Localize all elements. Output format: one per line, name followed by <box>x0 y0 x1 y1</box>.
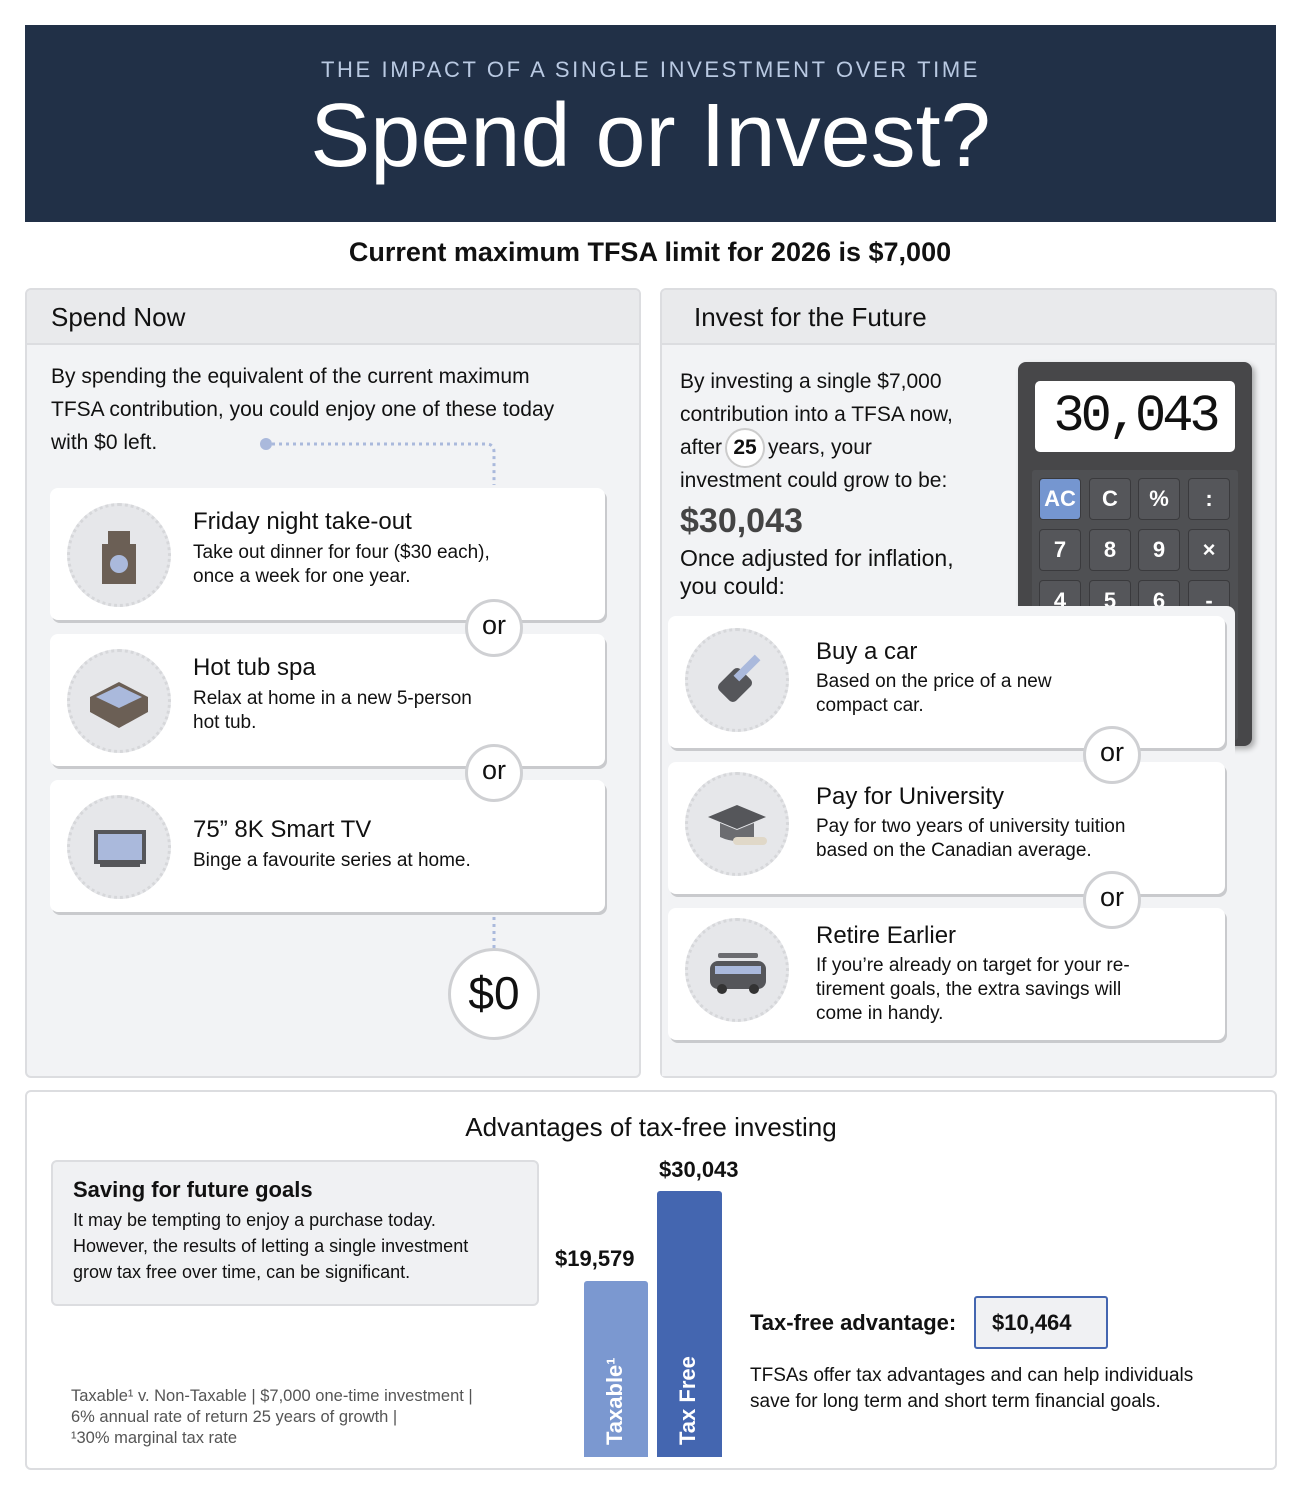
calculator: 30,043 <box>1053 387 1217 446</box>
card: university: Pay for two years of university tuition <box>816 816 1125 837</box>
card: smart tv <box>50 780 605 912</box>
heading: Advantages of tax-free investing <box>465 1112 837 1142</box>
icon: hot tub <box>67 649 171 753</box>
calculator: C <box>1102 486 1118 511</box>
panel: spend now: By spending the equivalent of the current maximum <box>51 365 530 388</box>
bar chart: $19,579 <box>555 1246 635 1271</box>
or badge: or <box>482 755 506 785</box>
TFSA limit heading: Current maximum TFSA limit for 2026 is $7,000 <box>349 237 951 267</box>
tax-free advantage: Tax-free advantage: <box>750 1310 956 1335</box>
$0 badge <box>448 948 540 1040</box>
icon: take-out bag <box>67 503 171 607</box>
card: car: Based on the price of a new <box>816 671 1052 692</box>
icon: van <box>685 918 789 1022</box>
card: university: based on the Canadian average. <box>816 840 1092 861</box>
panel: invest: $30,043 <box>680 502 803 540</box>
saving box: It may be tempting to enjoy a purchase today. <box>73 1210 436 1230</box>
icon: tv <box>67 795 171 899</box>
bar chart <box>555 1157 739 1457</box>
card: take-out <box>50 488 605 620</box>
panel: spend now: Spend Now <box>51 302 185 332</box>
panel: advantages: TFSAs offer tax advantages and can help individuals <box>750 1365 1193 1386</box>
footnote: ¹30% marginal tax rate <box>71 1429 237 1447</box>
calculator: % <box>1149 486 1169 511</box>
panel: invest: investment could grow to be: <box>680 469 947 492</box>
card: smart tv: 75” 8K Smart TV <box>193 816 371 843</box>
card: retire: tirement goals, the extra savings will <box>816 979 1121 1000</box>
card: retire: Retire Earlier <box>816 922 956 949</box>
panel: advantages: $10,464 <box>992 1310 1072 1335</box>
card: hot tub <box>50 634 605 766</box>
panel: invest: after years, your <box>680 436 872 459</box>
panel: invest: Once adjusted for inflation, <box>680 545 954 571</box>
or badge <box>1083 871 1141 929</box>
card: car: compact car. <box>816 695 924 716</box>
calculator: × <box>1203 537 1215 562</box>
card: retire: come in handy. <box>816 1003 943 1024</box>
panel: spend now: TFSA contribution, you could enjoy one of these today <box>51 398 554 421</box>
panel: advantages <box>25 1090 1277 1470</box>
panel: invest: By investing a single $7,000 <box>680 370 942 393</box>
title: Spend or Invest? <box>310 86 991 186</box>
bar chart: $30,043 <box>659 1157 739 1182</box>
or badge: or <box>1100 882 1124 912</box>
icon: car key <box>685 628 789 732</box>
$0 badge: $0 <box>468 967 520 1019</box>
saving box: grow tax free over time, can be significant. <box>73 1262 410 1282</box>
saving box: However, the results of letting a single investment <box>73 1236 468 1256</box>
card: retire <box>668 908 1225 1040</box>
card: take-out: Friday night take-out <box>193 508 412 535</box>
panel: invest: contribution into a TFSA now, <box>680 403 953 426</box>
calculator: 4 <box>1054 588 1066 613</box>
card: smart tv: Binge a favourite series at home. <box>193 850 471 871</box>
or badge: or <box>482 610 506 640</box>
panel: invest: Invest for the Future <box>694 302 927 332</box>
subtitle: THE IMPACT OF A SINGLE INVESTMENT OVER TIME <box>321 57 980 82</box>
card: hot tub: Relax at home in a new 5-person <box>193 688 472 709</box>
saving box <box>51 1160 539 1306</box>
calculator: - <box>1205 588 1213 613</box>
calculator: 9 <box>1153 537 1165 562</box>
or badge <box>1083 726 1141 784</box>
panel: invest: 25 <box>733 436 757 459</box>
card: hot tub: Hot tub spa <box>193 654 316 681</box>
card: take-out: Take out dinner for four ($30 each), <box>193 542 490 563</box>
panel: invest: you could: <box>680 573 785 599</box>
panel: advantages: save for long term and short term financial goals. <box>750 1391 1161 1412</box>
bar chart: Taxable¹ <box>602 1357 627 1445</box>
or badge <box>465 744 523 802</box>
or badge: or <box>1100 737 1124 767</box>
card: car <box>668 616 1225 748</box>
saving box: Saving for future goals <box>73 1177 313 1202</box>
panel: spend now: with $0 left. <box>51 431 157 454</box>
footnote: Taxable¹ v. Non-Taxable | $7,000 one-time investment | <box>71 1387 473 1405</box>
calculator <box>1018 362 1252 746</box>
panel: invest <box>660 288 1277 1078</box>
calculator: : <box>1205 486 1213 511</box>
calculator: 5 <box>1104 588 1116 613</box>
bar chart: Tax Free <box>675 1356 700 1445</box>
icon: graduation cap <box>685 772 789 876</box>
card: hot tub: hot tub. <box>193 712 256 733</box>
panel: spend now <box>25 288 641 1078</box>
footnote: 6% annual rate of return 25 years of growth | <box>71 1408 397 1426</box>
card: retire: If you’re already on target for your re- <box>816 955 1130 976</box>
calculator: AC <box>1044 486 1076 511</box>
card: car: Buy a car <box>816 638 917 665</box>
header banner <box>25 25 1276 222</box>
or badge <box>465 599 523 657</box>
footnote <box>71 1387 473 1447</box>
calculator: 7 <box>1054 537 1066 562</box>
card: university: Pay for University <box>816 783 1004 810</box>
calculator: 6 <box>1153 588 1165 613</box>
calculator: 8 <box>1104 537 1116 562</box>
card: university <box>668 762 1225 894</box>
card: take-out: once a week for one year. <box>193 566 411 587</box>
